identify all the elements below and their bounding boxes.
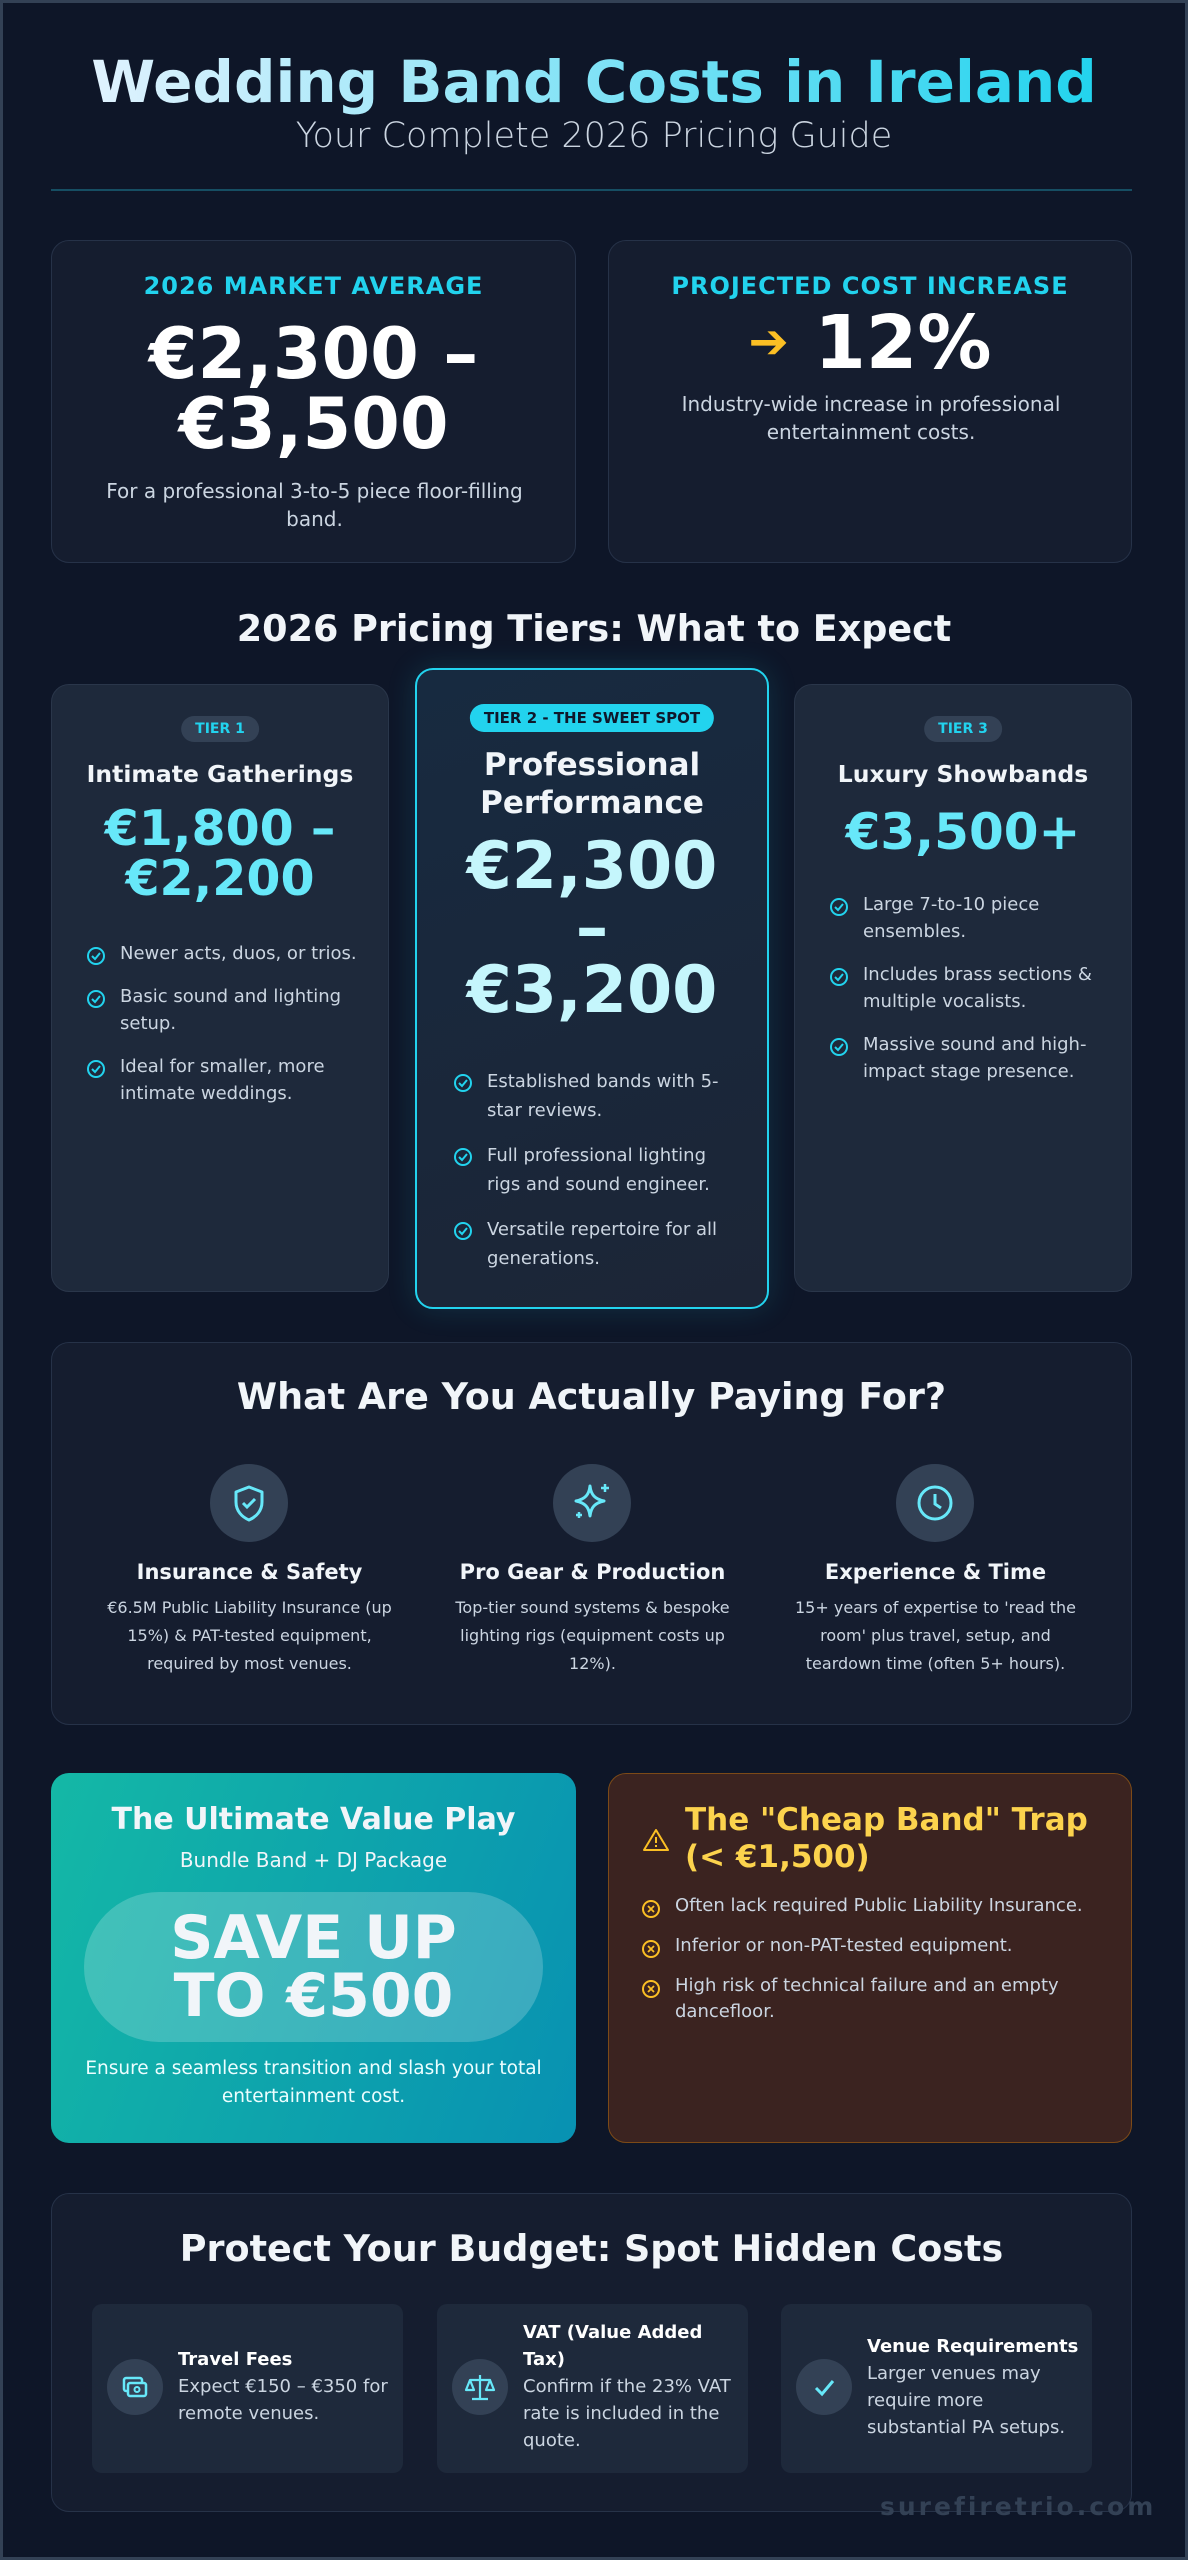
big stat: ➔ 12% [748, 300, 992, 386]
item: insurance [107, 1464, 392, 1673]
item: travel fees: Expect €150 – €350 for remote venues. [178, 2376, 388, 2424]
savings pill: SAVE UP [170, 1903, 457, 1973]
badge: TIER 3 [938, 721, 988, 737]
tier title: Performance [480, 785, 704, 821]
item: experience [795, 1464, 1076, 1673]
tier title: Luxury Showbands [838, 760, 1088, 788]
heading: pricing tiers: 2026 Pricing Tiers: What to Expect [237, 607, 951, 650]
item: insurance: Insurance & Safety [137, 1560, 362, 1584]
bullets: Often lack required Public Liability Insurance. [675, 1895, 1083, 1916]
price: €3,200 [467, 953, 717, 1028]
bullets: Newer acts, duos, or trios. [120, 943, 357, 964]
panel: tier 1 [51, 684, 389, 1292]
price: €2,300 [467, 829, 717, 904]
bullets [454, 1071, 719, 1269]
price: €1,800 – [105, 800, 335, 857]
badge [924, 716, 1002, 742]
badge [470, 704, 714, 732]
watermark: surefiretrio.com [880, 2492, 1156, 2521]
item: VAT: Confirm if the 23% VAT rate is included in the quote. [523, 2376, 731, 2451]
icon: sparkles [553, 1464, 631, 1542]
heading: Protect Your Budget: Spot Hidden Costs [180, 2227, 1003, 2270]
title: Wedding Band Costs in Ireland [91, 48, 1097, 116]
big price [147, 313, 478, 465]
price [465, 829, 717, 1028]
item: venue: Larger venues may require more substantial PA setups. [867, 2363, 1065, 2438]
bullets: High risk of technical failure and an empty dancefloor. [675, 1975, 1059, 2022]
tier title: Intimate Gatherings [87, 760, 353, 788]
bullets [642, 1895, 1083, 2022]
item: experience: Experience & Time [825, 1560, 1046, 1584]
item: venue [781, 2304, 1092, 2473]
bullets: Ideal for smaller, more intimate weddings. [120, 1056, 325, 1104]
panel: hidden costs [51, 2193, 1132, 2512]
bullets: Versatile repertoire for all generations. [487, 1219, 717, 1269]
price [104, 800, 335, 907]
panel: tier 2 [415, 668, 769, 1309]
panel: tier 3 [794, 684, 1132, 1292]
item: venue: Venue Requirements [867, 2336, 1078, 2357]
item: travel fees [92, 2304, 403, 2473]
item: pro gear [455, 1464, 730, 1673]
item: VAT [437, 2304, 748, 2473]
bullets: Full professional lighting rigs and sound engineer. [487, 1145, 710, 1195]
price: €3,500+ [846, 803, 1080, 861]
price: – [576, 891, 608, 966]
bullets: Large 7-to-10 piece ensembles. [863, 894, 1039, 942]
caption: Ensure a seamless transition and slash your total entertainment cost. [85, 2058, 542, 2107]
badge [181, 716, 259, 742]
item: insurance: €6.5M Public Liability Insurance (up 15%) & PAT-tested equipment, required by most venues. [107, 1598, 392, 1673]
subtitle: Your Complete 2026 Pricing Guide [296, 116, 892, 156]
bullets: Inferior or non-PAT-tested equipment. [675, 1935, 1012, 1956]
icon: check [796, 2359, 852, 2415]
title: The Ultimate Value Play [112, 1802, 515, 1837]
title: The "Cheap Band" Trap (< €1,500) [685, 1802, 1088, 1875]
icon: money [107, 2359, 163, 2415]
heading: What Are You Actually Paying For? [237, 1375, 946, 1418]
big price: €3,500 [178, 383, 449, 465]
label: PROJECTED COST INCREASE [671, 272, 1069, 300]
subtitle: Bundle Band + DJ Package [180, 1848, 447, 1872]
icon: scales [452, 2359, 508, 2415]
panel: cost increase [608, 240, 1132, 563]
savings pill [84, 1892, 543, 2042]
item: travel fees: Travel Fees [178, 2349, 292, 2370]
icon: clock [896, 1464, 974, 1542]
bullets [87, 943, 357, 1104]
bullets [830, 894, 1092, 1082]
item: VAT: VAT (Value Added Tax) [523, 2322, 702, 2370]
item: pro gear: Pro Gear & Production [460, 1560, 725, 1584]
tier title [480, 747, 704, 821]
bullets: Established bands with 5-star reviews. [487, 1071, 719, 1121]
item: pro gear: Top-tier sound systems & bespoke lighting rigs (equipment costs up 12%). [455, 1598, 730, 1673]
savings pill: TO €500 [174, 1961, 453, 2031]
price: €2,200 [125, 850, 315, 907]
icon: shield [210, 1464, 288, 1542]
big price: €2,300 – [149, 313, 478, 395]
bullets: Massive sound and high-impact stage presence. [863, 1034, 1086, 1082]
panel: value play [51, 1773, 576, 2143]
tier title: Professional [484, 747, 700, 783]
panel: cheap band trap [608, 1773, 1132, 2143]
label: 2026 MARKET AVERAGE [144, 272, 483, 300]
icon: warning [643, 1829, 669, 1851]
caption: For a professional 3-to-5 piece floor-filling band. [106, 479, 523, 531]
bullets: Includes brass sections & multiple vocalists. [863, 964, 1092, 1012]
item: experience: 15+ years of expertise to 'read the room' plus travel, setup, and teardown time (often 5+ hours). [795, 1598, 1076, 1673]
badge: TIER 1 [195, 721, 245, 737]
caption: Industry-wide increase in professional entertainment costs. [682, 392, 1060, 444]
panel: what are you paying for [51, 1342, 1132, 1725]
panel: market average [51, 240, 576, 563]
badge: TIER 2 - THE SWEET SPOT [484, 709, 700, 727]
bullets: Basic sound and lighting setup. [120, 986, 341, 1034]
